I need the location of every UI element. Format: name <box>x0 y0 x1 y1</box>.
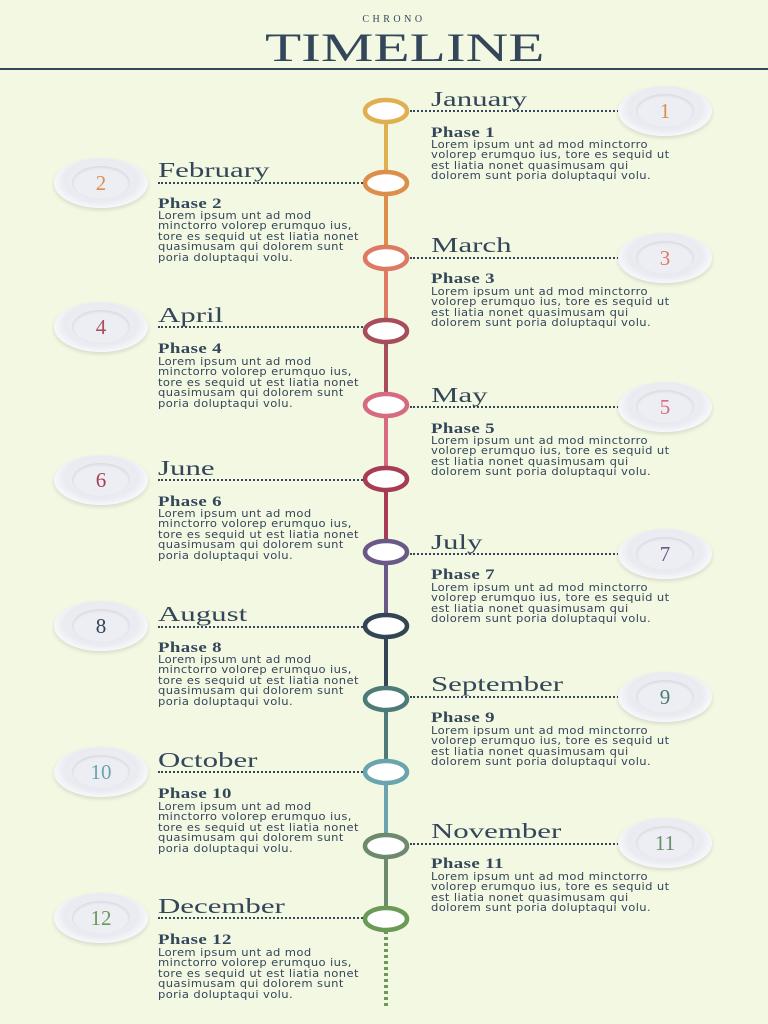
entry: May <box>410 382 713 478</box>
entry: February <box>53 158 363 264</box>
text: Phase 5 <box>431 421 495 437</box>
text: dolorem sunt poria doluptaqui volu. <box>431 902 651 914</box>
text: tore es sequid ut est liatia nonet <box>158 968 359 980</box>
text: March <box>431 233 512 257</box>
text: quasimusam qui dolorem sunt <box>158 685 344 697</box>
text: 5 <box>660 395 670 419</box>
entry: October <box>53 747 363 855</box>
text: August <box>158 602 247 626</box>
text: 7 <box>660 542 670 566</box>
text: 2 <box>96 171 106 195</box>
text: quasimusam qui dolorem sunt <box>158 241 344 253</box>
text: est liatia nonet quasimusam qui <box>431 160 629 172</box>
entry: March <box>410 233 713 329</box>
text: Phase 6 <box>158 494 222 510</box>
text: Phase 7 <box>431 567 495 583</box>
text: poria doluptaqui volu. <box>158 252 293 264</box>
text: May <box>431 383 488 407</box>
text: Phase 12 <box>158 932 232 948</box>
text: volorep erumquo ius, tore es sequid ut <box>431 149 670 161</box>
text: Phase 2 <box>158 196 222 212</box>
entry: November <box>410 818 713 914</box>
text: volorep erumquo ius, tore es sequid ut <box>431 735 670 747</box>
text: July <box>431 530 482 554</box>
text: Phase 10 <box>158 786 232 802</box>
text: quasimusam qui dolorem sunt <box>158 978 344 990</box>
text: Lorem ipsum unt ad mod minctorro <box>431 582 648 594</box>
text: dolorem sunt poria doluptaqui volu. <box>431 613 651 625</box>
text: est liatia nonet quasimusam qui <box>431 603 629 615</box>
text: dolorem sunt poria doluptaqui volu. <box>431 756 651 768</box>
text: minctorro volorep erumquo ius, <box>158 664 352 676</box>
text: 1 <box>660 99 670 123</box>
text: volorep erumquo ius, tore es sequid ut <box>431 296 670 308</box>
text: February <box>158 158 269 182</box>
text: tore es sequid ut est liatia nonet <box>158 822 359 834</box>
text: January <box>431 87 527 111</box>
text: minctorro volorep erumquo ius, <box>158 518 352 530</box>
entry: December <box>53 893 363 1001</box>
text: poria doluptaqui volu. <box>158 843 293 855</box>
text: Lorem ipsum unt ad mod <box>158 210 312 222</box>
text: quasimusam qui dolorem sunt <box>158 387 344 399</box>
text: poria doluptaqui volu. <box>158 989 293 1001</box>
text: Lorem ipsum unt ad mod <box>158 654 312 666</box>
text: poria doluptaqui volu. <box>158 398 293 410</box>
text: December <box>158 894 285 918</box>
text: Lorem ipsum unt ad mod minctorro <box>431 286 648 298</box>
text: Lorem ipsum unt ad mod <box>158 801 312 813</box>
text: minctorro volorep erumquo ius, <box>158 811 352 823</box>
text: poria doluptaqui volu. <box>158 696 293 708</box>
entry: September <box>410 672 713 768</box>
text: Phase 4 <box>158 341 222 357</box>
text: 6 <box>96 468 106 492</box>
header <box>265 14 544 70</box>
text: 3 <box>660 246 670 270</box>
text: 12 <box>90 906 112 930</box>
text: poria doluptaqui volu. <box>158 550 293 562</box>
text: 4 <box>96 315 106 339</box>
text: minctorro volorep erumquo ius, <box>158 366 352 378</box>
text: minctorro volorep erumquo ius, <box>158 220 352 232</box>
text: 8 <box>96 614 106 638</box>
text: September <box>431 672 563 696</box>
text: June <box>158 456 215 480</box>
text: quasimusam qui dolorem sunt <box>158 539 344 551</box>
text: Lorem ipsum unt ad mod minctorro <box>431 725 648 737</box>
text: dolorem sunt poria doluptaqui volu. <box>431 170 651 182</box>
text: Phase 8 <box>158 640 222 656</box>
text: volorep erumquo ius, tore es sequid ut <box>431 445 670 457</box>
text: Lorem ipsum unt ad mod <box>158 947 312 959</box>
text: Phase 9 <box>431 710 495 726</box>
text: volorep erumquo ius, tore es sequid ut <box>431 881 670 893</box>
text: Lorem ipsum unt ad mod <box>158 508 312 520</box>
text: dolorem sunt poria doluptaqui volu. <box>431 317 651 329</box>
text: est liatia nonet quasimusam qui <box>431 456 629 468</box>
text: volorep erumquo ius, tore es sequid ut <box>431 592 670 604</box>
text: est liatia nonet quasimusam qui <box>431 746 629 758</box>
text: est liatia nonet quasimusam qui <box>431 892 629 904</box>
text: est liatia nonet quasimusam qui <box>431 307 629 319</box>
text: quasimusam qui dolorem sunt <box>158 832 344 844</box>
entry: April <box>53 302 363 410</box>
text: October <box>158 748 257 772</box>
text: 11 <box>655 831 675 855</box>
text: November <box>431 819 561 843</box>
entry: June <box>53 455 363 562</box>
text: tore es sequid ut est liatia nonet <box>158 377 359 389</box>
entry: July <box>410 529 713 625</box>
text: Lorem ipsum unt ad mod <box>158 356 312 368</box>
text: Lorem ipsum unt ad mod minctorro <box>431 871 648 883</box>
entry: January <box>410 86 713 182</box>
text: Phase 1 <box>431 125 495 141</box>
text: minctorro volorep erumquo ius, <box>158 957 352 969</box>
text: Phase 11 <box>431 856 504 872</box>
text: dolorem sunt poria doluptaqui volu. <box>431 466 651 478</box>
text: tore es sequid ut est liatia nonet <box>158 529 359 541</box>
subtitle: CHRONO <box>362 14 426 25</box>
text: tore es sequid ut est liatia nonet <box>158 675 359 687</box>
text: tore es sequid ut est liatia nonet <box>158 231 359 243</box>
entry: August <box>53 601 363 708</box>
text: Lorem ipsum unt ad mod minctorro <box>431 435 648 447</box>
text: 10 <box>90 760 112 784</box>
text: 9 <box>660 685 670 709</box>
title: TIMELINE <box>265 25 544 70</box>
text: Phase 3 <box>431 271 495 287</box>
text: April <box>158 303 223 327</box>
text: Lorem ipsum unt ad mod minctorro <box>431 139 648 151</box>
